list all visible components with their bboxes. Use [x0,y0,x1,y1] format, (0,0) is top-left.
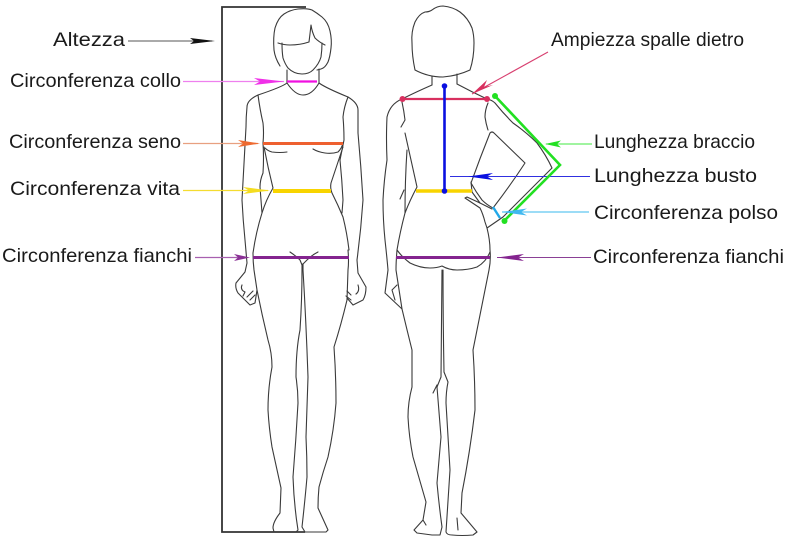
label: wrist circumference: Circonferenza polso [594,202,778,224]
label: bust circumference: Circonferenza seno [9,131,181,153]
label: neck circumference: Circonferenza collo [10,70,181,92]
measurement: arm length [492,93,592,224]
measurement: back hips [396,254,591,261]
back figure [383,6,552,536]
measurement: wrist [493,207,589,218]
label: arm length: Lunghezza braccio [594,131,755,153]
label: waist circumference: Circonferenza vita [10,178,180,200]
height frame [222,7,306,532]
measurement: back shoulder width [400,52,548,102]
label: torso length: Lunghezza busto [594,165,757,187]
label: hip circumference back: Circonferenza fianchi [593,246,784,268]
front figure [236,9,366,532]
label: height: Altezza [53,29,125,51]
measurement: hips line and arrow [195,254,349,261]
measurement: torso length [442,83,590,194]
measurement: waist line and arrow [183,187,331,194]
measurement: bust line and arrow [183,140,343,147]
measurement: neck line and arrow [183,78,317,85]
label: back shoulder width: Ampiezza spalle dietro [551,29,744,51]
label: hip circumference front: Circonferenza fianchi [2,245,192,267]
measurement: back waist [416,189,472,193]
measurement: height arrow [128,38,215,44]
